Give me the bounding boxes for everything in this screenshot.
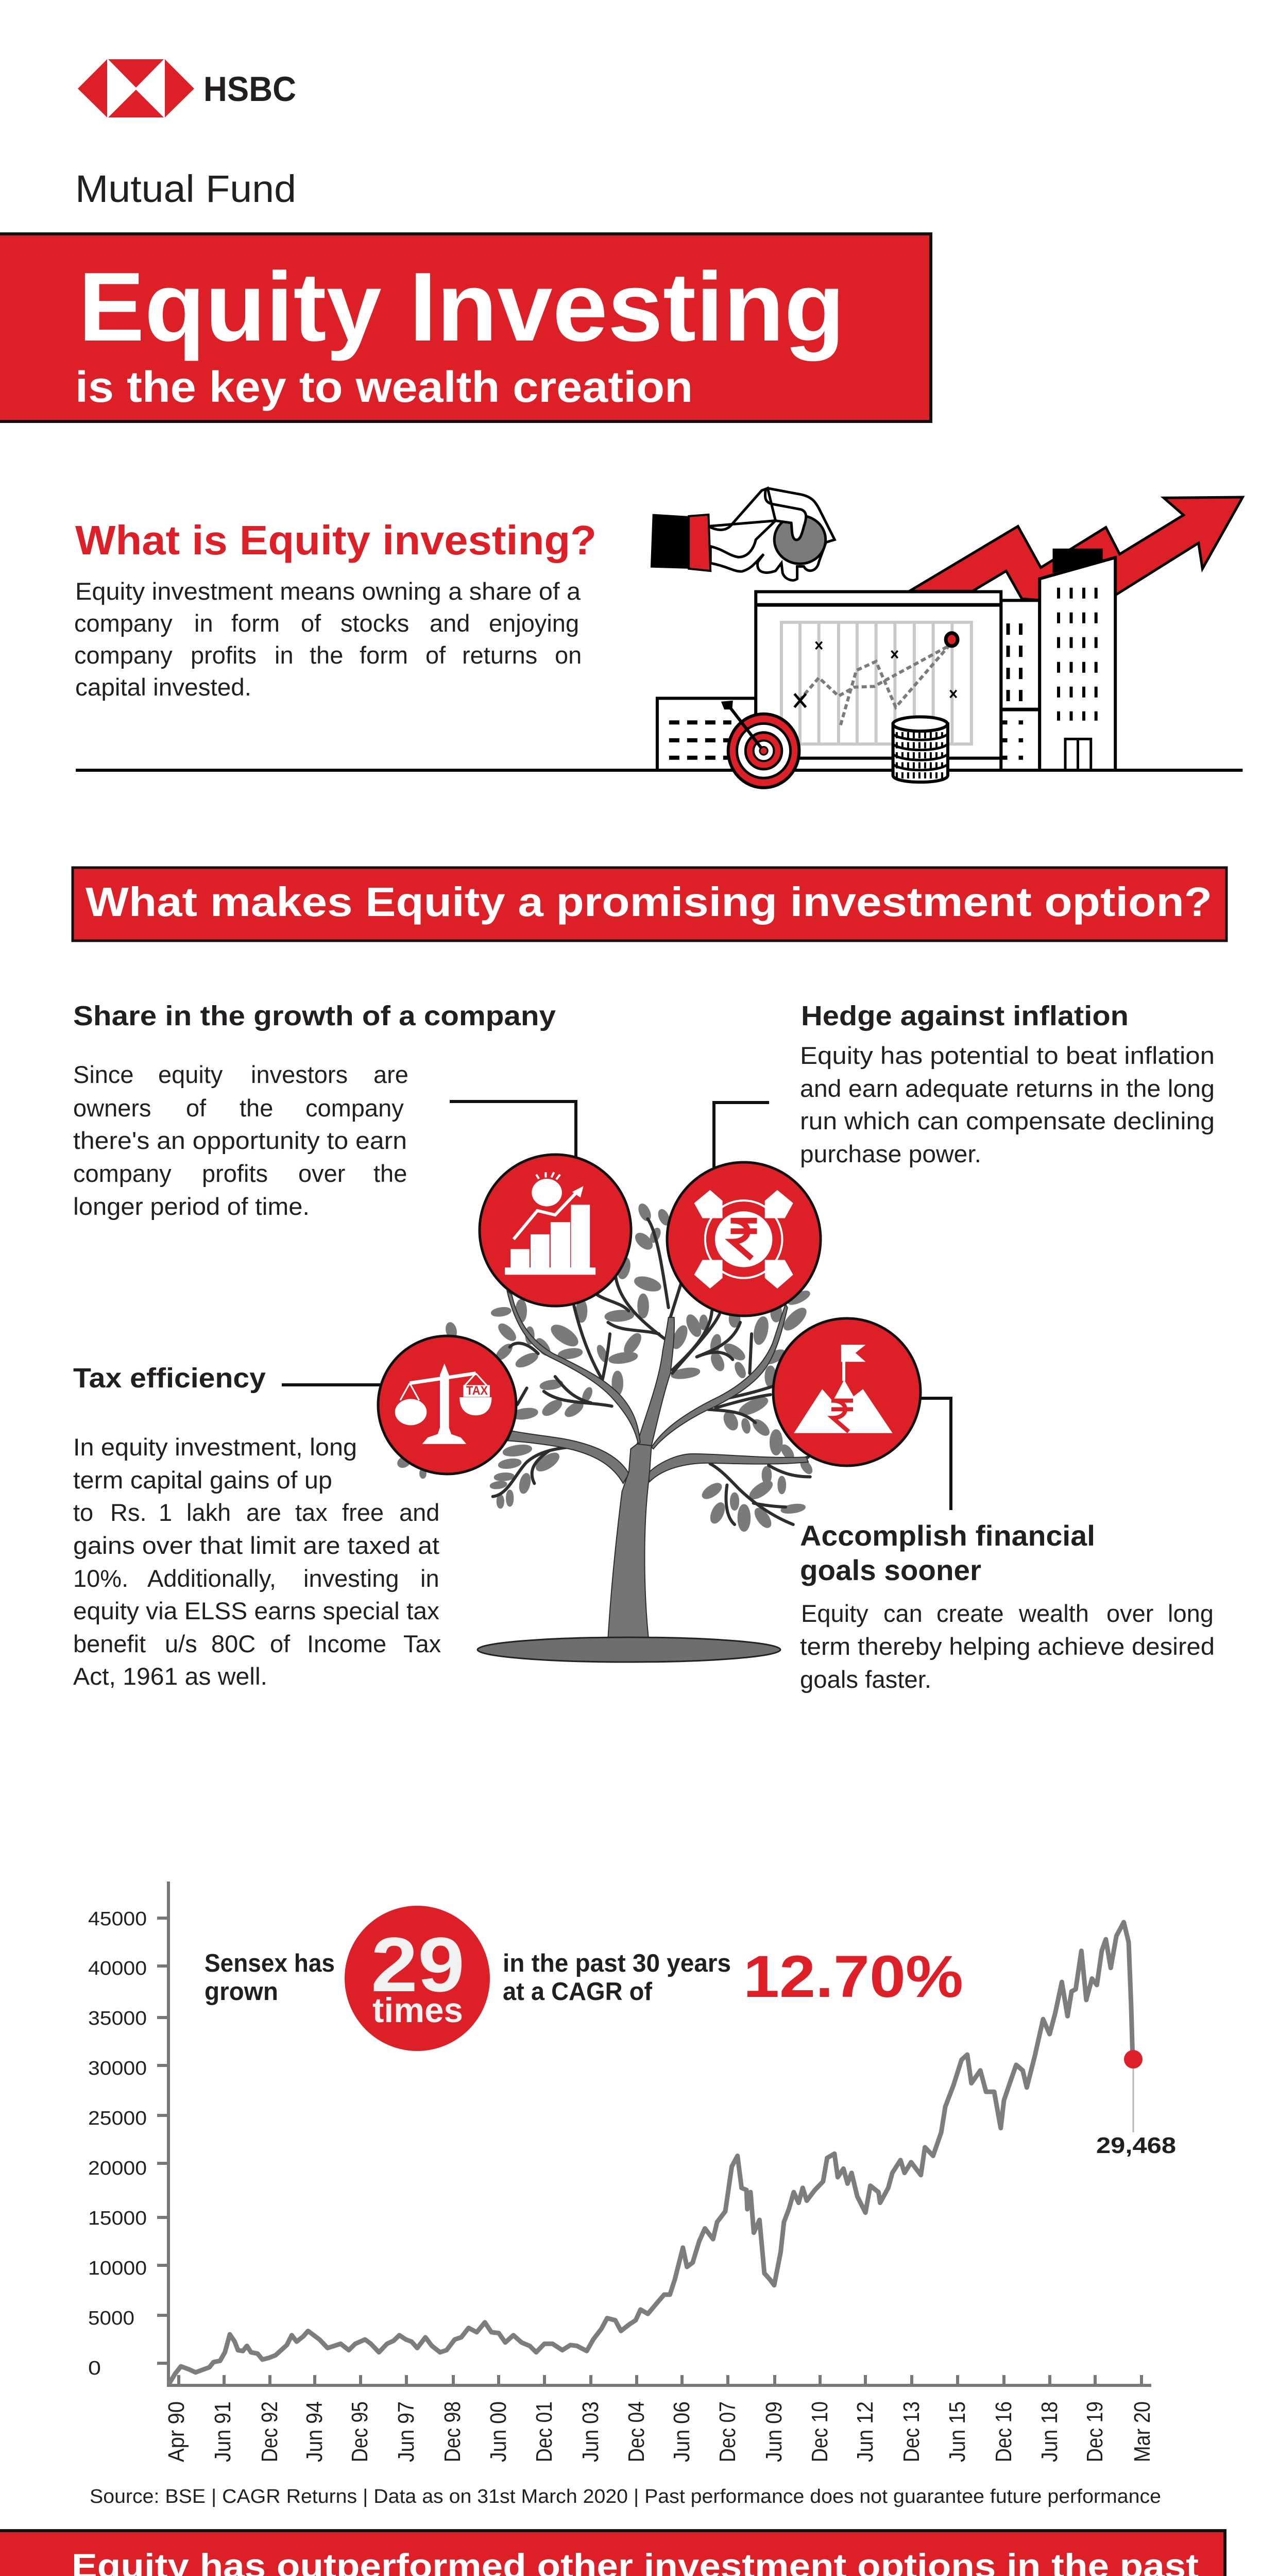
icon circle: tax efficiency [378,1336,516,1474]
text block: tax efficiency: u/s [165,1630,197,1657]
icon: chart window [756,592,1001,758]
logo: HSBC [78,59,296,117]
text block: accomplish financial goals: can [883,1600,923,1627]
tree leaves [397,1204,813,1530]
icon circle: growth of a company [480,1155,631,1306]
text block: accomplish financial goals: long [1168,1600,1214,1627]
text block: share in the growth of a company: equity [158,1061,223,1088]
y axis labels: 5000 [88,2308,134,2329]
section: what is equity investing: What is Equity investing? [75,517,597,563]
subtitle: Mutual Fund: Mutual Fund [75,167,296,210]
callout: 29 times: at a CAGR of [503,1978,653,2006]
text block: accomplish financial goals: wealth [1018,1600,1089,1627]
x axis labels: Dec 19 [1082,2401,1107,2462]
text block: tax efficiency: and [399,1499,439,1526]
tree twigs [493,1219,810,1524]
x axis labels: Dec 04 [624,2401,649,2462]
section: what is equity investing: Equity investment means owning a share of a [75,578,581,605]
x axis labels: Dec 07 [715,2401,740,2462]
text block: share in the growth of a company: over [298,1160,345,1187]
title banner [0,234,931,421]
end point marker [1096,2050,1176,2158]
section: what is equity investing: in [275,641,294,669]
x axis labels: Dec 10 [807,2401,832,2462]
text block: accomplish financial goals: goals sooner [800,1554,981,1586]
illustration: tree [397,1204,813,1638]
text block: tax efficiency: to [73,1499,93,1526]
section: what is equity investing: form [231,609,280,637]
y axis labels: 15000 [88,2208,147,2229]
icon: coin stack [893,717,948,782]
chart source note: Source: BSE | CAGR Returns | Data as on 31st March 2020 | Past performance does not guarantee future performance [90,2486,1161,2507]
text block: tax efficiency: Income [307,1630,386,1657]
illustration: growth city with hand, chart, target and coins [76,488,1242,788]
section: what is equity investing: the [310,641,343,669]
section: what is equity investing: company [74,609,173,637]
text block: tax efficiency [73,1363,441,1690]
logo: HSBC: HSBC [203,70,296,109]
text block: accomplish financial goals: over [1106,1600,1153,1627]
icon circle: financial goals [773,1318,921,1466]
text block: accomplish financial goals: Accomplish financial [800,1519,1095,1552]
callout: 29 times: in the past 30 years [503,1950,731,1977]
connector lines [282,1101,951,1510]
text block: hedge against inflation [800,1001,1215,1167]
x axis labels: Jun 97 [394,2401,419,2462]
x axis labels: Jun 15 [945,2401,970,2462]
x axis labels: Dec 95 [347,2401,372,2462]
section: what is equity investing: in [194,609,213,637]
section header: what makes equity promising: What makes Equity a promising investment option? [86,879,1212,925]
tree base [478,1637,780,1662]
text block: share in the growth of a company: profits [202,1160,268,1187]
text block: tax efficiency: investing [303,1565,399,1592]
text block: hedge against inflation: and earn adequate returns in the long [800,1075,1215,1102]
x axis labels: Dec 01 [532,2401,557,2462]
x axis labels: Jun 06 [669,2401,694,2462]
section: what is equity investing: form [360,641,408,669]
x axis labels [164,2401,1155,2462]
y axis labels: 35000 [88,2008,147,2029]
section: what is equity investing: profits [191,641,257,669]
text block: tax efficiency: Additionally, [147,1565,276,1592]
x axis labels: Mar 20 [1130,2401,1155,2462]
text block: share in the growth of a company: are [373,1061,408,1088]
text block: tax efficiency: 10%. [73,1565,128,1592]
section header: what makes equity promising [73,868,1226,941]
section: what is equity investing: on [555,641,582,669]
text block: tax efficiency: Tax [403,1630,441,1657]
x axis labels: Dec 16 [991,2401,1016,2462]
text block: share in the growth of a company [73,1001,556,1220]
x axis labels: Jun 09 [761,2401,787,2462]
section: what is equity investing: enjoying [489,609,579,637]
text block: share in the growth of a company: of [186,1094,207,1122]
y axis labels: 0 [88,2358,101,2379]
icon: tower [1040,549,1115,770]
text block: accomplish financial goals [800,1519,1215,1693]
x axis labels: Dec 98 [440,2401,465,2462]
text block: tax efficiency: In equity investment, long [73,1433,357,1461]
y axis labels: 10000 [88,2258,147,2279]
callout: 29 times: times [372,1991,463,2030]
text block: accomplish financial goals: create [936,1600,1004,1627]
sensex line [168,1922,1133,2384]
text block: share in the growth of a company: company [305,1094,404,1122]
x axis labels: Jun 03 [578,2401,603,2462]
text block: share in the growth of a company: Since [73,1061,134,1088]
section: what is equity investing: and [430,609,470,637]
text block: hedge against inflation: Equity has potential to beat inflation [800,1042,1215,1069]
callout: 29 times: grown [205,1978,278,2006]
text block: hedge against inflation: run which can compensate declining [800,1107,1215,1134]
text block: tax efficiency: gains over that limit are taxed at [73,1532,439,1559]
icon: hand dropping a coin [651,488,834,580]
section: what is equity investing: company [74,641,173,669]
icon: low building [657,698,756,770]
text block: share in the growth of a company: investors [251,1061,348,1088]
text block: tax efficiency: benefit [73,1630,146,1657]
text block: accomplish financial goals: Equity [801,1600,868,1627]
text block: tax efficiency: free [342,1499,384,1526]
chart axes and ticks [157,1882,1151,2385]
icon circle: hedge against inflation [667,1162,821,1316]
x axis labels: Jun 18 [1037,2401,1062,2462]
y axis labels: 45000 [88,1908,147,1930]
text block: tax efficiency: Tax efficiency [73,1363,266,1394]
text block: tax efficiency: tax [295,1499,328,1526]
text block: tax efficiency: of [270,1630,291,1657]
text block: hedge against inflation: purchase power. [800,1140,981,1167]
callout: 29 times: 12.70% [743,1944,963,2010]
section: what is equity investing: of [425,641,446,669]
callout: 29 times: Sensex has [205,1950,335,1977]
end point marker: 29,468 [1096,2133,1176,2158]
section: what is equity investing: returns [462,641,537,669]
section: what is equity investing [74,517,597,701]
callout: 29 times [205,1906,963,2051]
x axis labels: Dec 92 [257,2401,282,2462]
text block: tax efficiency: are [246,1499,281,1526]
callout: 29 times: 29 [371,1921,465,2008]
y axis labels: 40000 [88,1958,147,1979]
text block: share in the growth of a company: owners [73,1094,151,1122]
text block: share in the growth of a company: longer period of time. [73,1193,310,1220]
y axis labels: 30000 [88,2058,147,2079]
text block: accomplish financial goals: goals faster. [800,1666,931,1693]
icon: red growth arrow [910,497,1242,600]
icon: target with dart [721,701,799,788]
icon: middle building [1001,600,1040,770]
y axis labels: 25000 [88,2108,147,2129]
y axis labels: 20000 [88,2158,147,2179]
text block: tax efficiency: Rs. [110,1499,146,1526]
text block: tax efficiency: lakh [186,1499,231,1526]
text block: tax efficiency: 80C [211,1630,255,1657]
text block: tax efficiency: in [420,1565,439,1592]
text block: tax efficiency: 1 [159,1499,172,1526]
text block: tax efficiency: equity via ELSS earns special tax [73,1597,439,1624]
icon circle: tax efficiency: TAX [466,1384,488,1398]
chart: Sensex line chart [88,1882,1176,2462]
x axis labels: Jun 00 [486,2401,511,2462]
title banner: Equity Investing [78,252,845,362]
x axis labels: Dec 13 [899,2401,924,2462]
text block: share in the growth of a company: the [373,1160,407,1187]
divider: ground line [76,769,1242,772]
section: what is equity investing: capital invested. [75,673,251,701]
section header: equity outperformed [0,2531,1225,2576]
title banner: is the key to wealth creation [75,363,693,411]
text block: share in the growth of a company: there's an opportunity to earn [73,1127,407,1154]
text block: tax efficiency: Act, 1961 as well. [73,1663,267,1690]
text block: share in the growth of a company: company [73,1160,172,1187]
x axis labels: Jun 91 [210,2401,235,2462]
text block: accomplish financial goals: term thereby helping achieve desired [800,1633,1215,1660]
x axis labels: Jun 94 [302,2401,327,2462]
x axis labels: Apr 90 [164,2401,189,2462]
tree trunk and branches [507,1291,808,1638]
text block: tax efficiency: term capital gains of up [73,1466,332,1494]
section: what is equity investing: of [301,609,321,637]
text block: share in the growth of a company: Share in the growth of a company [73,1001,556,1031]
y axis labels [88,1908,147,2379]
text block: hedge against inflation: Hedge against inflation [801,1001,1129,1031]
text block: share in the growth of a company: the [240,1094,273,1122]
section: what is equity investing: stocks [340,609,409,637]
x axis labels: Jun 12 [853,2401,878,2462]
